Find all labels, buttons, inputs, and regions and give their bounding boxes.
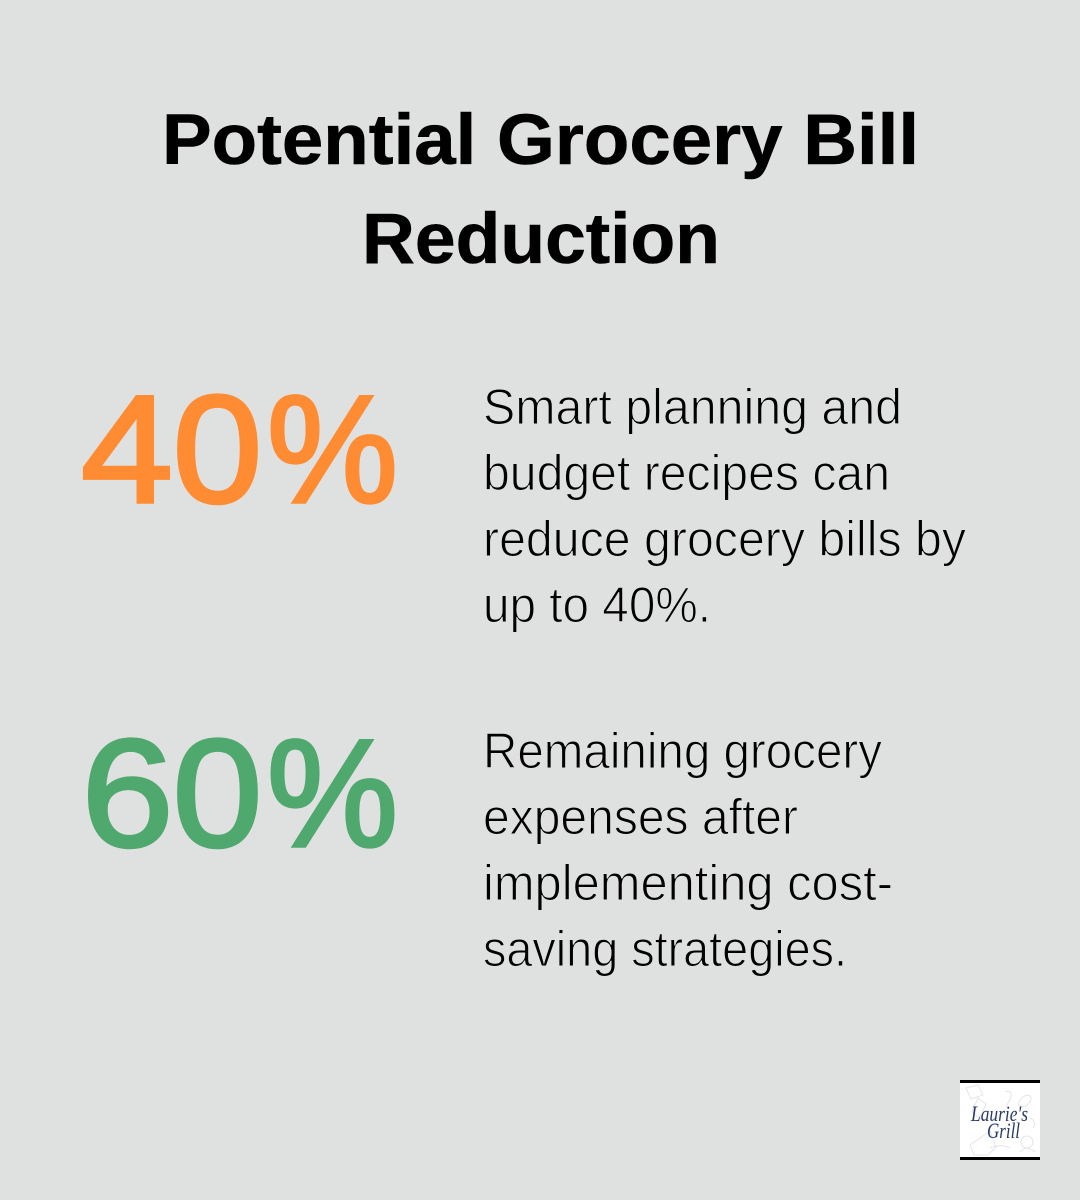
stat number: 60% [82,708,398,879]
text block: 40 percent description: Smart planning and [483,379,902,435]
title [162,101,919,279]
stat number: 40% [81,364,398,535]
text block: 60 percent description: saving strategies. [483,921,847,977]
text block: 60 percent description: expenses after [483,789,798,845]
stat number: 60%: % [267,708,398,879]
title: Potential Grocery Bill [162,101,919,180]
text block: 40 percent description [483,379,966,633]
panel: 40 percent stat [81,364,966,633]
text block: 60 percent description: Remaining grocery [483,723,882,779]
panel: 60 percent stat [82,708,893,977]
icon: Laurie's Grill logo [960,1080,1040,1160]
stat number: 60%: 0 [173,708,262,879]
icon: Laurie's Grill logo: Laurie's [970,1101,1028,1126]
text block: 40 percent description: budget recipes can [483,445,890,501]
text block: 40 percent description: up to 40%. [483,577,711,633]
text block: 60 percent description: implementing cost- [483,855,893,911]
icon: Laurie's Grill logo: Grill [987,1118,1020,1143]
stat number: 40%: 0 [173,364,262,535]
stat number: 40%: 4 [81,364,173,535]
title: Reduction [362,200,720,279]
text block: 40 percent description: reduce grocery bills by [483,511,966,567]
stat number: 60%: 6 [82,708,174,879]
text block: 60 percent description [483,723,893,977]
stat number: 40%: % [267,364,398,535]
